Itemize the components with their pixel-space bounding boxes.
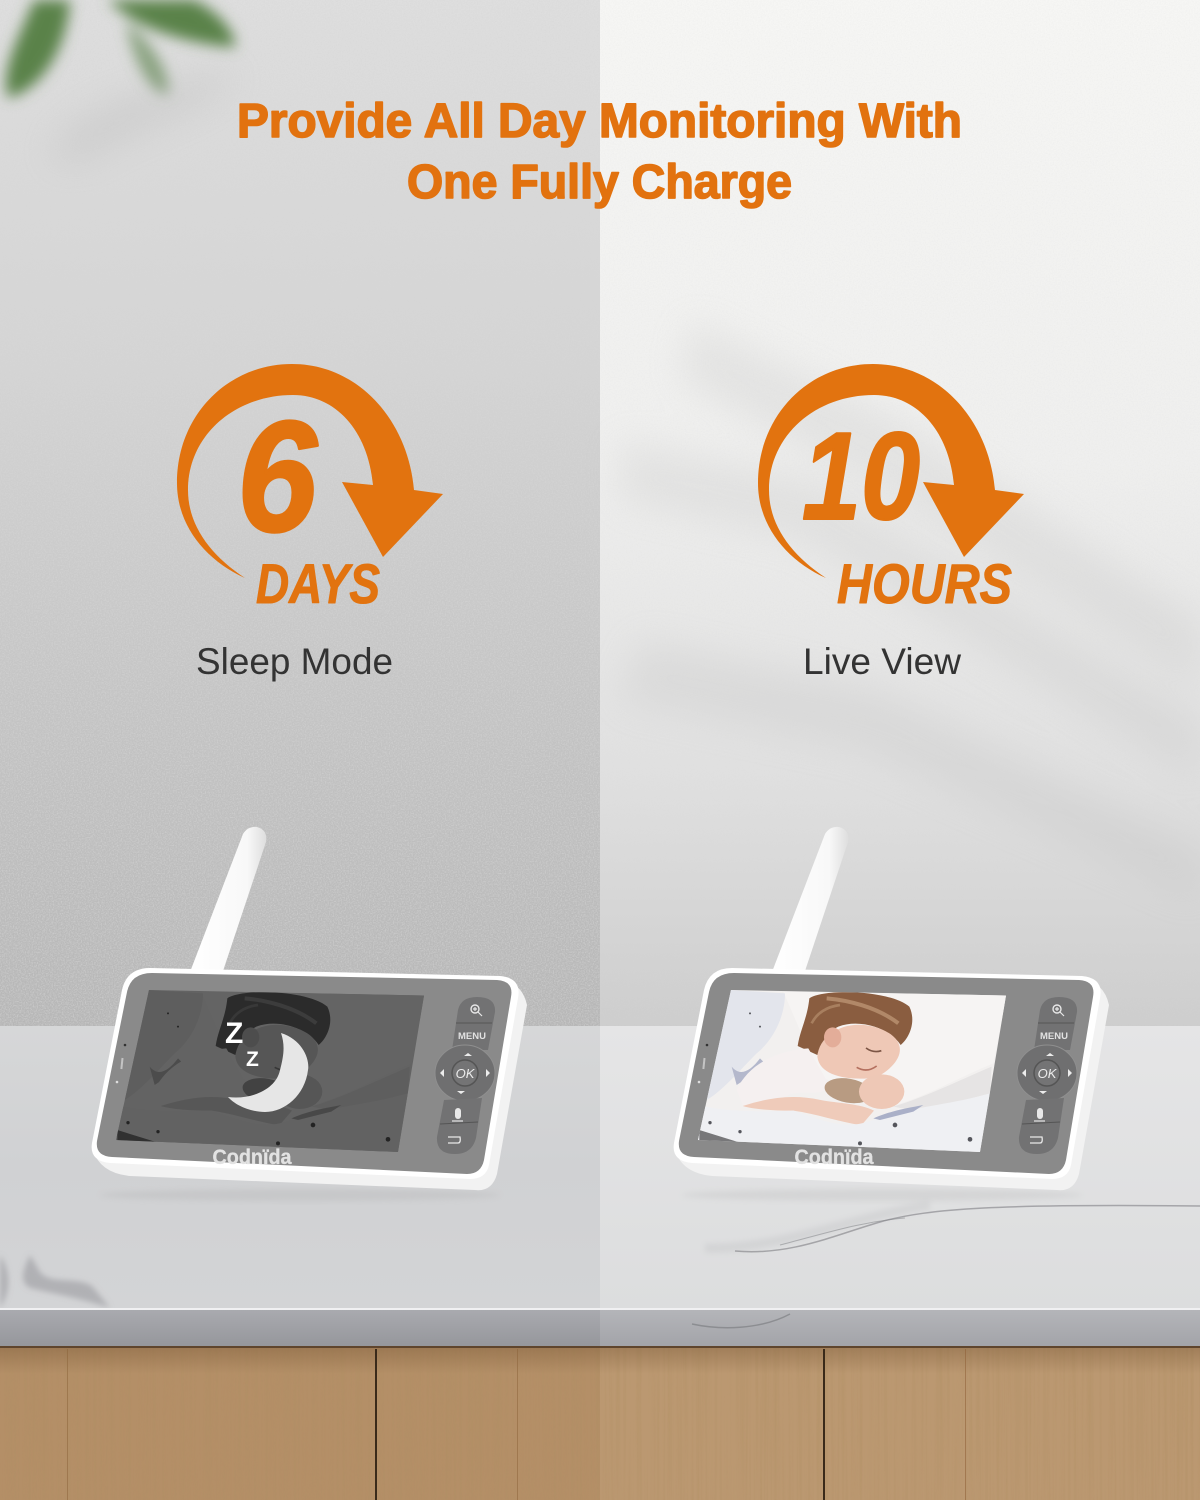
icon: circular arrow <box>177 364 443 578</box>
icon: sleep letters: Z <box>225 1017 243 1050</box>
icon: moon <box>228 1033 308 1112</box>
leaf shadow, top left <box>6 0 236 98</box>
title: Provide All Day Monitoring With <box>237 95 962 148</box>
monitor: live view <box>674 827 1109 1201</box>
wood cabinet <box>0 1346 1200 1500</box>
wall: sleep side <box>0 0 600 1030</box>
monitor: sleep mode <box>92 827 527 1201</box>
icon: sleep letters: Z <box>246 1048 259 1071</box>
label: sleep mode: Sleep Mode <box>196 641 393 682</box>
icon: sleep letters <box>225 1017 259 1071</box>
countertop <box>0 1026 1200 1310</box>
icon: circular arrow <box>758 364 1024 578</box>
badge: 6 days <box>177 364 443 615</box>
wall: live view side <box>600 0 1200 1030</box>
number 10: 10 <box>802 408 920 546</box>
unit: hours: HOURS <box>837 552 1012 615</box>
badge: 10 hours <box>758 364 1024 615</box>
title <box>237 95 962 209</box>
label: live view: Live View <box>803 641 961 682</box>
marble veins right <box>705 1205 1200 1252</box>
number 6: 6 <box>237 389 318 565</box>
wall shadow under leaf <box>50 70 235 160</box>
countertop front edge <box>0 1310 1200 1346</box>
title: One Fully Charge <box>407 156 792 209</box>
marble veins left <box>0 1255 110 1308</box>
unit: days: DAYS <box>256 552 380 615</box>
